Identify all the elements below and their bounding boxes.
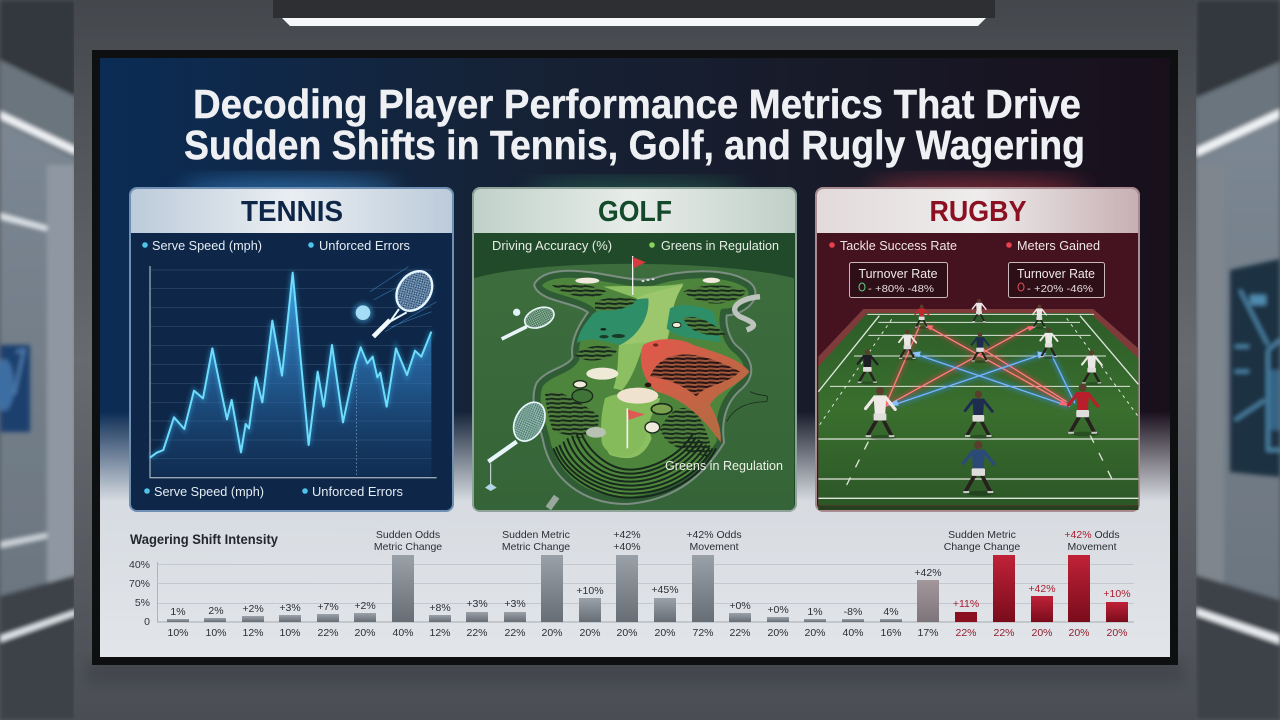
golf legend: Driving Accuracy (%) bbox=[492, 238, 612, 253]
bar x labels: 40% bbox=[392, 627, 414, 639]
bar value labels: +11% bbox=[953, 598, 979, 610]
bar x labels: 22% bbox=[993, 627, 1015, 639]
bar x labels: 17% bbox=[917, 627, 939, 639]
bar x labels: 20% bbox=[767, 627, 789, 639]
bar annotations bbox=[374, 529, 1120, 553]
bar x labels: 20% bbox=[1068, 627, 1090, 639]
glowing arrows bbox=[885, 325, 1075, 407]
bar value labels: +10% bbox=[1103, 588, 1131, 600]
rugby header bbox=[817, 189, 1138, 233]
golf legend bbox=[492, 238, 779, 253]
bar x labels: 22% bbox=[955, 627, 977, 639]
left room wall bbox=[0, 0, 76, 720]
bar annotations: +42% Odds bbox=[686, 529, 742, 541]
callout: turnover rate left: - +80% -48% bbox=[868, 283, 934, 295]
y axis labels bbox=[129, 559, 150, 628]
bar annotations: +42% Odds bbox=[1064, 529, 1120, 541]
bar x labels: 10% bbox=[167, 627, 189, 639]
bar value labels bbox=[170, 567, 1131, 618]
bar chart: wagering shift intensity bbox=[129, 529, 1134, 639]
title: Decoding Player Performance Metrics That Drive bbox=[193, 81, 1081, 127]
bar value labels: 1% bbox=[807, 606, 823, 618]
panel: tennis bbox=[129, 187, 454, 512]
bar value labels: +0% bbox=[729, 600, 751, 612]
tennis bottom legend bbox=[144, 484, 403, 499]
golf header bbox=[474, 189, 795, 233]
icon: tennis racket and ball bbox=[353, 263, 441, 337]
bar x labels: 20% bbox=[1106, 627, 1128, 639]
rugby legend: Tackle Success Rate bbox=[840, 238, 957, 253]
callout: turnover rate left bbox=[850, 262, 948, 298]
tennis bottom legend: Unforced Errors bbox=[312, 484, 403, 499]
red zone bbox=[641, 339, 749, 442]
right side screen bbox=[1230, 259, 1280, 477]
y axis labels: 70% bbox=[129, 578, 150, 590]
bunkers bbox=[572, 278, 720, 438]
tennis top legend: Unforced Errors bbox=[319, 238, 410, 253]
bar value labels: 1% bbox=[170, 606, 186, 618]
bar x labels: 20% bbox=[616, 627, 638, 639]
bar value labels: +42% bbox=[914, 567, 942, 579]
rugby field illustration bbox=[818, 299, 1138, 508]
icon: large racket bbox=[485, 397, 551, 491]
bar annotations: Metric Change bbox=[502, 541, 570, 553]
callout: turnover rate right: - +20% -46% bbox=[1027, 283, 1093, 295]
y axis labels: 0 bbox=[144, 616, 150, 628]
bar value labels: 4% bbox=[883, 606, 899, 618]
panel: rugby bbox=[815, 187, 1140, 512]
tennis top legend bbox=[142, 238, 410, 253]
bar x labels: 16% bbox=[880, 627, 902, 639]
bar x labels: 22% bbox=[317, 627, 339, 639]
tennis line chart bbox=[150, 263, 441, 478]
bar x labels: 20% bbox=[804, 627, 826, 639]
bar annotations: +40% bbox=[613, 541, 641, 553]
bar x labels: 20% bbox=[541, 627, 563, 639]
icon: small racket bbox=[502, 303, 557, 339]
golf header: GOLF bbox=[598, 196, 672, 228]
bar x labels: 12% bbox=[429, 627, 451, 639]
golf lower label: Greens in Regulation bbox=[665, 458, 783, 473]
left side screen bbox=[0, 345, 30, 432]
bar annotations: Sudden Metric bbox=[948, 529, 1016, 541]
white path stream bbox=[735, 297, 760, 330]
bar x labels: 20% bbox=[354, 627, 376, 639]
fairway bbox=[602, 283, 683, 458]
bar x labels: 20% bbox=[579, 627, 601, 639]
bar x labels bbox=[167, 627, 1128, 639]
bar value labels: +7% bbox=[317, 601, 339, 613]
rugby legend: Meters Gained bbox=[1017, 238, 1100, 253]
chart title: Wagering Shift Intensity bbox=[130, 532, 278, 547]
bar x labels: 22% bbox=[504, 627, 526, 639]
bar annotations: +42% bbox=[613, 529, 641, 541]
bars bbox=[167, 555, 1128, 622]
bar value labels: +3% bbox=[279, 602, 301, 614]
callout: turnover rate right bbox=[1008, 262, 1104, 298]
icon: flags bbox=[627, 256, 646, 448]
bar annotations: Movement bbox=[1067, 541, 1117, 553]
golf course illustration bbox=[474, 256, 794, 510]
bar annotations: Sudden Odds bbox=[376, 529, 440, 541]
bar x labels: 10% bbox=[205, 627, 227, 639]
rugby header: RUGBY bbox=[930, 196, 1026, 228]
title bbox=[184, 81, 1085, 168]
bar x labels: 10% bbox=[279, 627, 301, 639]
bar x labels: 12% bbox=[242, 627, 264, 639]
tennis bottom legend: Serve Speed (mph) bbox=[154, 484, 264, 499]
screen background bbox=[100, 58, 1170, 657]
bar x labels: 20% bbox=[654, 627, 676, 639]
bar x labels: 22% bbox=[466, 627, 488, 639]
bar value labels: +10% bbox=[576, 585, 604, 597]
right room wall bbox=[1196, 0, 1280, 720]
ceiling light fixture bbox=[273, 0, 995, 26]
bar value labels: +45% bbox=[651, 584, 679, 596]
title: Sudden Shifts in Tennis, Golf, and Rugly Wagering bbox=[184, 122, 1085, 168]
bar x labels: 40% bbox=[842, 627, 864, 639]
bar value labels: 2% bbox=[208, 605, 224, 617]
callout: turnover rate left: Turnover Rate bbox=[858, 266, 938, 281]
bar value labels: +8% bbox=[429, 602, 451, 614]
bar value labels: -8% bbox=[844, 606, 862, 618]
bar x labels: 22% bbox=[729, 627, 751, 639]
tennis top legend: Serve Speed (mph) bbox=[152, 238, 262, 253]
teal zones bbox=[577, 298, 649, 345]
contour bands bbox=[552, 284, 607, 297]
players bbox=[858, 299, 1102, 496]
y axis labels: 5% bbox=[135, 597, 150, 609]
bar value labels: +3% bbox=[466, 598, 488, 610]
bar value labels: +2% bbox=[242, 603, 264, 615]
bar value labels: +42% bbox=[1028, 583, 1056, 595]
bar annotations: Change Change bbox=[944, 541, 1020, 553]
bar value labels: +3% bbox=[504, 598, 526, 610]
bar annotations: Sudden Metric bbox=[502, 529, 570, 541]
y axis labels: 40% bbox=[129, 559, 150, 571]
tennis header: TENNIS bbox=[241, 196, 343, 228]
display frame bbox=[92, 50, 1178, 665]
bar annotations: Movement bbox=[689, 541, 739, 553]
golf legend: Greens in Regulation bbox=[661, 238, 779, 253]
rugby legend bbox=[829, 238, 1100, 253]
callout: turnover rate right: Turnover Rate bbox=[1017, 266, 1095, 281]
bar value labels: +2% bbox=[354, 600, 376, 612]
tennis header bbox=[131, 189, 452, 233]
bar value labels: +0% bbox=[767, 604, 789, 616]
panel: golf bbox=[472, 187, 797, 512]
bar annotations: Metric Change bbox=[374, 541, 442, 553]
bar x labels: 72% bbox=[692, 627, 714, 639]
bar x labels: 20% bbox=[1031, 627, 1053, 639]
